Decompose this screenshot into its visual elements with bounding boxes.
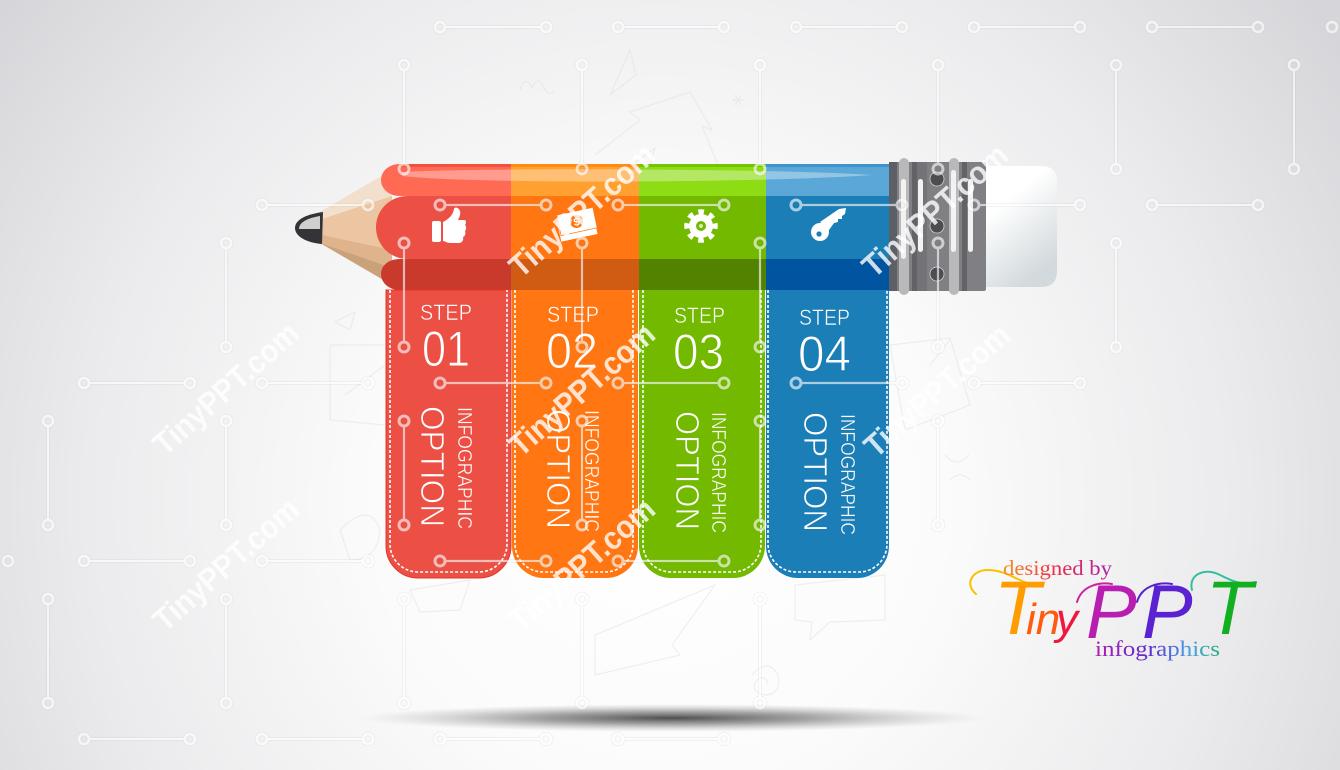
pencil wood tip [320,170,392,285]
metal ferrule [889,158,986,295]
infographic text 2: INFOGRAPHIC [580,410,602,532]
step 02 number: 02 [546,323,598,379]
column 3 barrel: green [639,164,766,290]
column 1 barrel: red [376,164,511,290]
column 4 barrel: blue [766,164,890,290]
logo Tiny PPT: P [1142,570,1193,655]
watermarks: TinyPPT.com [502,491,662,638]
icon: money: $ [572,216,581,229]
logo Tiny PPT: P [1086,570,1137,655]
panel 4 body [766,290,889,578]
watermarks: TinyPPT.com [146,315,306,462]
logo swashes [970,570,1256,602]
step 04 number: 04 [798,326,851,382]
step 03 number: 03 [673,324,724,380]
floor shadow [360,704,984,732]
step 03 label: STEP [674,303,725,328]
icon: gear [687,212,715,240]
logo Tiny PPT: in [1026,595,1060,644]
panel 1 body [386,290,511,578]
logo: designed by TinyPPT infographics [970,556,1257,661]
watermarks: TinyPPT.com [502,137,662,284]
panel 3 body [639,290,765,578]
infographic text 4: INFOGRAPHIC [836,414,858,535]
panel: step 02 [512,207,638,578]
watermarks: TinyPPT.com [502,316,662,463]
watermarks: TinyPPT.com [857,317,1017,464]
option text 1: OPTION [414,406,451,527]
watermarks: TinyPPT.com [146,491,306,638]
step 01 label: STEP [420,300,472,325]
logo infographics: infographics [1095,636,1220,661]
panel: step 01 [386,208,511,578]
option text 2: OPTION [540,409,577,529]
icon: key [811,208,846,241]
watermarks: TinyPPT.com [855,137,1015,284]
panel 3 stitching [643,290,761,572]
panel 2 stitching [515,290,633,572]
step 01 number: 01 [422,321,470,377]
pencil [295,158,1057,295]
logo Tiny PPT [994,566,1257,655]
option text 4: OPTION [797,412,834,532]
panel 2 body [512,290,638,578]
icon: thumbs up [432,208,466,243]
option text 3: OPTION [669,411,706,530]
logo Tiny PPT: T [994,566,1045,651]
panel: step 04 [766,208,889,578]
eraser [984,166,1057,287]
infographic text 1: INFOGRAPHIC [453,407,475,529]
logo Tiny PPT: T [1206,566,1257,651]
infographic text 3: INFOGRAPHIC [707,412,729,533]
panel: step 03 [639,212,765,578]
step 04 label: STEP [799,305,850,330]
logo designed by: designed by [1003,556,1113,580]
barrel highlight [402,169,872,182]
watermarks [146,137,1017,638]
panel 4 stitching [768,290,887,572]
background doodles [330,50,970,695]
step 02 label: STEP [547,302,599,327]
icon: money [556,207,598,242]
pencil graphite point [295,212,323,244]
logo Tiny PPT: y [1053,595,1081,644]
panel 1 stitching [390,290,507,572]
column 2 barrel: orange [511,164,639,290]
